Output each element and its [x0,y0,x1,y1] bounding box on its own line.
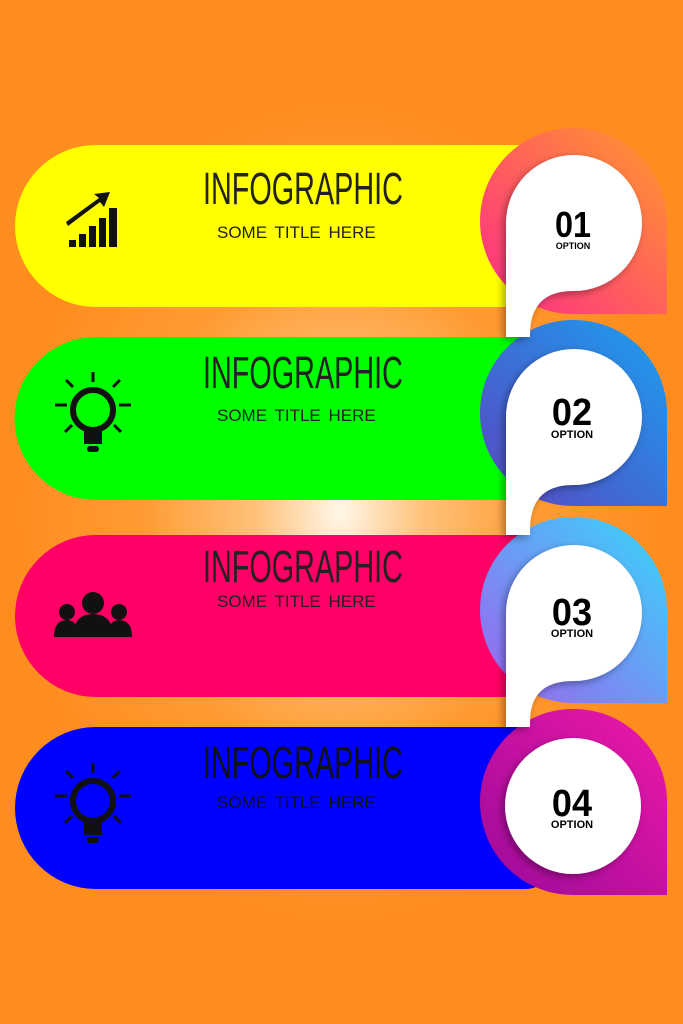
bar 1 yellow [15,145,530,307]
drop 4 [480,709,667,895]
icon: people [54,592,132,637]
heading 1: SOME TITLE HERE [217,223,376,242]
number 04: 04 [552,781,592,824]
heading 2: INFOGRAPHIC [203,349,403,399]
heading 1: INFOGRAPHIC [203,165,403,215]
heading 3: INFOGRAPHIC [203,543,403,593]
number 03: OPTION [551,628,593,640]
drop 2 [480,320,667,506]
heading 4: INFOGRAPHIC [203,739,403,789]
drop 1 [480,128,667,314]
number 01: 01 [555,205,591,245]
number 01: OPTION [556,241,590,251]
bar 3 pink [15,535,530,697]
white badge 2 [506,349,642,535]
heading 4 [203,739,403,812]
white badge 4 [505,738,641,874]
bar 2 green [14,337,530,500]
number 02: OPTION [551,429,593,441]
heading 4: SOME TITLE HERE [217,793,376,812]
number 02: 02 [552,390,592,433]
white badge 1 [506,155,642,337]
icon: growth chart [66,192,117,247]
heading 2: SOME TITLE HERE [217,406,376,425]
icon: bulb 1 [55,372,131,452]
white badge 3 [506,545,642,727]
heading 2 [203,349,403,425]
heading 1 [203,165,403,242]
number 04: OPTION [551,819,593,831]
heading 3: SOME TITLE HERE [217,592,376,611]
number 03: 03 [552,590,592,633]
bar 4 blue [15,727,545,889]
drop 3 [480,517,667,703]
icon: bulb 2 [55,763,131,843]
